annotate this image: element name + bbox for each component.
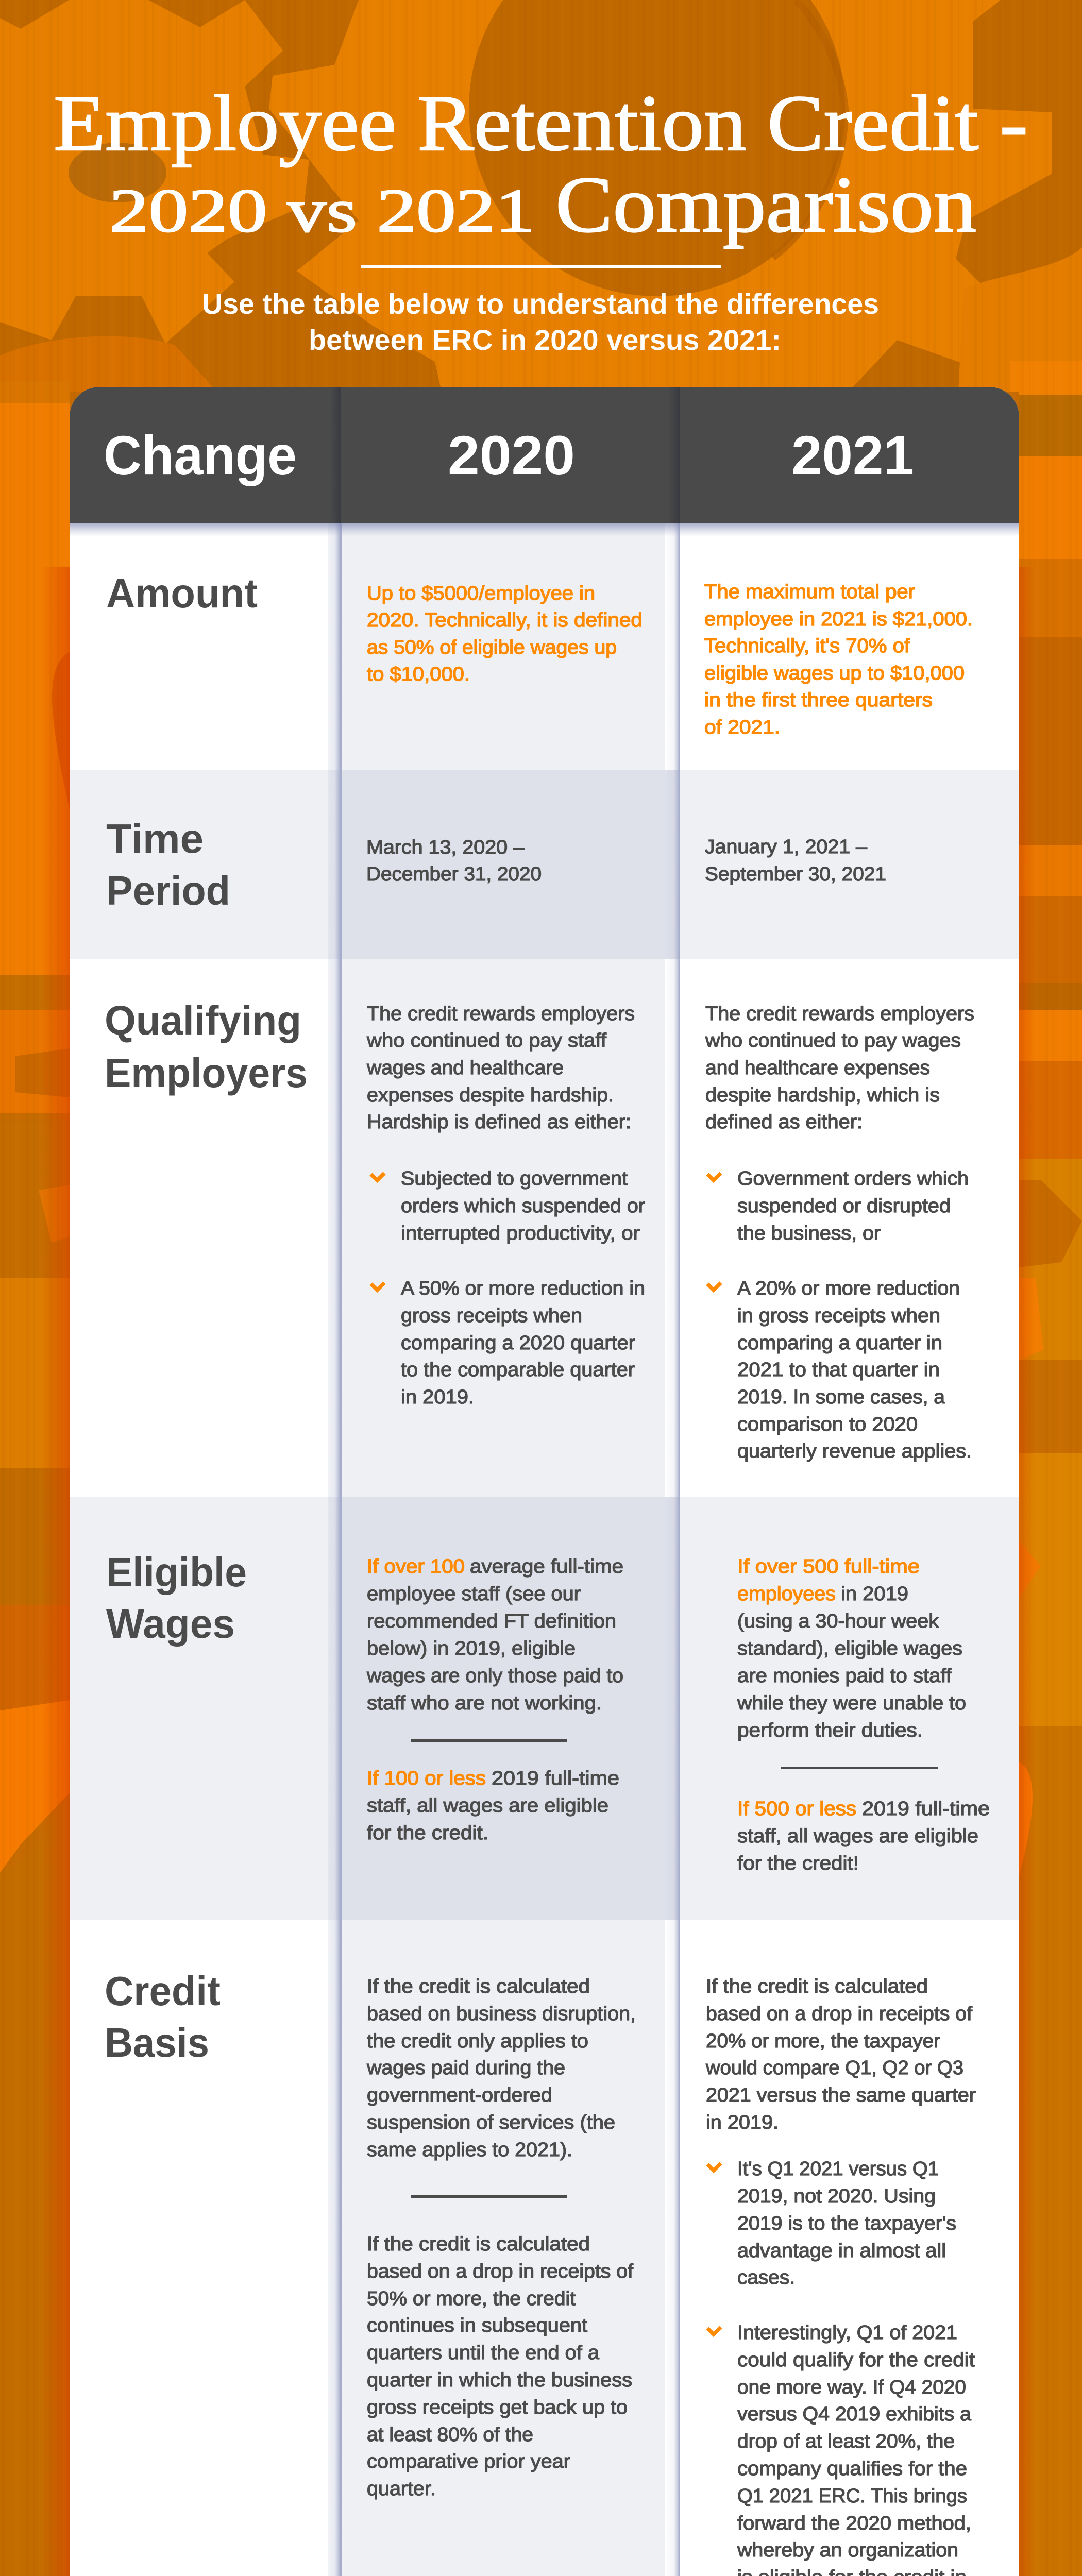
credit basis 2020: comparative prior year [367, 2451, 570, 2472]
credit basis 2021: in 2019. [706, 2112, 779, 2133]
row label: Eligible Wages: Eligible [106, 1549, 247, 1595]
amount 2020 text: to $10,000. [367, 664, 470, 685]
row label: Time Period: Time [106, 816, 204, 861]
time period 2020: March 13, 2020 – [366, 837, 525, 858]
icon: check [371, 1173, 384, 1180]
icon: check [371, 1283, 384, 1290]
title [54, 79, 1028, 249]
row band: eligible wages [70, 1497, 1019, 1920]
credit basis 2021: versus Q4 2019 exhibits a [737, 2403, 972, 2425]
credit basis 2021: advantage in almost all [737, 2240, 946, 2262]
qualifying employers 2021: The credit rewards employers [705, 1003, 974, 1025]
eligible wages 2021: staff, all wages are eligible [737, 1825, 978, 1847]
qualifying employers 2020: Subjected to government [401, 1168, 628, 1190]
qualifying employers 2020: The credit rewards employers [367, 1003, 635, 1025]
time period 2021 [705, 836, 886, 885]
qualifying employers 2021: despite hardship, which is [705, 1084, 940, 1106]
icon: check [707, 2327, 721, 2334]
icon: check [707, 1173, 721, 1180]
qualifying employers 2020: who continued to pay staff [366, 1030, 606, 1052]
qualifying employers 2020 [366, 1003, 645, 1408]
qualifying employers 2020: gross receipts when [401, 1305, 582, 1327]
amount 2021 text [704, 581, 973, 738]
qualifying employers 2021: quarterly revenue applies. [737, 1440, 972, 1462]
comparison table [70, 387, 1019, 2576]
qualifying employers 2020: in 2019. [401, 1386, 474, 1408]
time period 2020 [366, 837, 542, 885]
qualifying employers 2020: interrupted productivity, or [401, 1223, 640, 1244]
gear: inner ring shadow [773, 0, 845, 258]
qualifying employers 2021: in gross receipts when [737, 1305, 940, 1327]
eligible wages 2021: If 500 or less [737, 1798, 856, 1820]
icon: check [707, 2163, 721, 2171]
row label: Credit Basis: Basis [105, 2020, 209, 2065]
qualifying employers 2020: A 50% or more reduction in [401, 1278, 645, 1299]
eligible wages 2021 [737, 1556, 990, 1874]
qualifying employers 2021 [705, 1003, 974, 1462]
credit basis 2020: suspension of services (the [367, 2112, 615, 2133]
row label: Credit Basis [105, 1968, 221, 2065]
row label: Time Period: Period [106, 868, 230, 913]
qualifying employers 2020: Hardship is defined as either: [367, 1111, 631, 1133]
credit basis 2020: If the credit is calculated [367, 2233, 590, 2255]
credit basis 2021: 2019 is to the taxpayer's [737, 2213, 956, 2234]
eligible wages 2021: 2019 full-time [862, 1798, 990, 1820]
amount 2021 text: Technically, it's 70% of [704, 635, 910, 657]
amount 2020 text: as 50% of eligible wages up [367, 637, 617, 658]
credit basis 2021: forward the 2020 method, [737, 2513, 971, 2534]
hands at left and right edges [0, 336, 216, 392]
credit basis 2021: cases. [737, 2267, 795, 2289]
eligible wages 2021: perform their duties. [737, 1720, 923, 1741]
header bar [70, 387, 1019, 536]
row label: Eligible Wages [106, 1549, 247, 1647]
credit basis 2021: 2021 versus the same quarter [706, 2084, 976, 2106]
amount 2021 text: employee in 2021 is $21,000. [704, 608, 973, 630]
credit basis 2020: at least 80% of the [367, 2424, 533, 2446]
subtitle [202, 287, 879, 356]
credit basis 2020: government-ordered [367, 2084, 552, 2106]
credit basis 2020: quarters until the end of a [367, 2342, 600, 2364]
qualifying employers 2021: comparing a quarter in [737, 1332, 942, 1354]
eligible wages 2021: (using a 30-hour week [737, 1611, 939, 1632]
eligible wages 2020: staff who are not working. [367, 1692, 602, 1714]
eligible wages 2021: for the credit! [737, 1853, 859, 1874]
gear: centre [269, 0, 1052, 392]
amount 2021 text: of 2021. [704, 717, 780, 738]
row band: time period [70, 770, 1019, 959]
eligible wages 2021: while they were unable to [737, 1692, 966, 1714]
eligible wages 2020: 2019 full-time [492, 1768, 619, 1789]
gear: left hole [69, 143, 166, 202]
amount 2020 text: 2020. Technically, it is defined [367, 609, 643, 631]
eligible wages 2020: for the credit. [367, 1822, 488, 1844]
eligible wages 2021: standard), eligible wages [737, 1638, 962, 1659]
credit basis 2021: one more way. If Q4 2020 [737, 2377, 966, 2398]
gear: left [0, 0, 309, 344]
qualifying employers 2021: 2019. In some cases, a [737, 1386, 945, 1408]
row label: Qualifying Employers: Employers [105, 1050, 308, 1096]
amount 2021 text: in the first three quarters [704, 689, 933, 711]
amount 2020 text [367, 583, 643, 685]
qualifying employers 2020: orders which suspended or [401, 1195, 645, 1217]
credit basis 2020: quarter in which the business [367, 2369, 632, 2391]
qualifying employers 2020: expenses despite hardship. [367, 1084, 614, 1106]
credit basis 2020: based on business disruption, [367, 2003, 636, 2025]
qualifying employers 2021: who continued to pay wages [705, 1030, 961, 1052]
eligible wages 2020 [366, 1556, 623, 1844]
credit basis 2020: 50% or more, the credit [367, 2288, 576, 2310]
credit basis 2021: would compare Q1, Q2 or Q3 [705, 2057, 963, 2079]
credit basis 2020: gross receipts get back up to [367, 2397, 628, 2418]
credit basis 2020: wages paid during the [366, 2057, 565, 2079]
credit basis 2021: It's Q1 2021 versus Q1 [737, 2158, 939, 2180]
credit basis 2020: continues in subsequent [367, 2315, 587, 2336]
row label: Time Period [106, 816, 230, 913]
header: Change: Change [104, 424, 297, 486]
row label: Qualifying Employers: Qualifying [105, 997, 301, 1043]
row label: Eligible Wages: Wages [106, 1601, 235, 1647]
qualifying employers 2021: Government orders which [737, 1168, 969, 1190]
eligible wages 2020: If 100 or less [367, 1768, 486, 1789]
subtitle: Use the table below to understand the differences [202, 287, 879, 320]
left strip bands [0, 381, 70, 2576]
credit basis 2021: whereby an organization [737, 2539, 958, 2561]
eligible wages 2021: employees [737, 1583, 836, 1605]
row label: Amount: Amount [106, 570, 258, 616]
row label: Qualifying Employers [105, 997, 308, 1096]
qualifying employers 2020: wages and healthcare [366, 1057, 564, 1079]
time period 2021: January 1, 2021 – [705, 836, 868, 858]
amount 2021 text: eligible wages up to $10,000 [704, 663, 965, 684]
column 2020 shade [328, 523, 680, 2576]
qualifying employers 2021: defined as either: [705, 1111, 863, 1133]
eligible wages 2020: staff, all wages are eligible [367, 1795, 608, 1817]
title rule [361, 265, 721, 268]
credit basis 2021: company qualifies for the [737, 2458, 967, 2480]
qualifying employers 2021: the business, or [737, 1223, 881, 1244]
qualifying employers 2020: comparing a 2020 quarter [401, 1332, 635, 1354]
credit basis 2020: quarter. [367, 2478, 436, 2500]
credit basis 2021: Interestingly, Q1 of 2021 [737, 2322, 957, 2344]
credit basis 2020: based on a drop in receipts of [367, 2261, 633, 2282]
credit basis 2021: could qualify for the credit [737, 2349, 975, 2371]
eligible wages 2021: are monies paid to staff [737, 1665, 952, 1687]
credit basis 2021 [705, 1976, 976, 2576]
credit basis 2020: the credit only applies to [367, 2030, 588, 2052]
qualifying employers 2021: suspended or disrupted [737, 1195, 951, 1217]
credit basis 2021: Q1 2021 ERC. This brings [737, 2485, 967, 2507]
time period 2020: December 31, 2020 [366, 863, 542, 885]
qualifying employers 2020: to the comparable quarter [401, 1359, 635, 1381]
eligible wages 2020: wages are only those paid to [366, 1665, 623, 1687]
credit basis 2021: drop of at least 20%, the [737, 2431, 955, 2452]
amount 2021 text: The maximum total per [704, 581, 915, 603]
header: 2020: 2020 [448, 424, 575, 486]
row label: Credit Basis: Credit [105, 1968, 221, 2014]
eligible wages 2021: If over 500 full-time [737, 1556, 920, 1578]
eligible wages 2021: in 2019 [841, 1583, 908, 1605]
time period 2021: September 30, 2021 [705, 863, 886, 885]
credit basis 2020: same applies to 2021). [367, 2139, 572, 2161]
credit basis 2021: If the credit is calculated [706, 1976, 928, 1997]
eligible wages 2020: employee staff (see our [367, 1583, 581, 1605]
qualifying employers 2021: 2021 to that quarter in [737, 1359, 940, 1381]
subtitle: between ERC in 2020 versus 2021: [309, 324, 781, 356]
title: 2020 vs 2021 [109, 176, 535, 245]
qualifying employers 2021: comparison to 2020 [737, 1414, 918, 1435]
credit basis 2020 [366, 1976, 636, 2500]
qualifying employers 2021: A 20% or more reduction [737, 1278, 960, 1299]
eligible wages 2020: below) in 2019, eligible [367, 1638, 576, 1659]
title: Comparison [555, 160, 976, 249]
amount 2020 text: Up to $5000/employee in [367, 583, 595, 604]
credit basis 2021: 20% or more, the taxpayer [706, 2030, 940, 2052]
icon: check [707, 1283, 721, 1290]
credit basis 2021: 2019, not 2020. Using [737, 2185, 936, 2207]
credit basis 2021: based on a drop in receipts of [706, 2003, 972, 2025]
right strip bands [1019, 361, 1082, 2576]
header: 2021: 2021 [791, 424, 914, 486]
eligible wages 2020: If over 100 [367, 1556, 465, 1578]
eligible wages 2020: recommended FT definition [367, 1611, 616, 1632]
title: Employee Retention Credit - [54, 79, 1028, 167]
qualifying employers 2021: and healthcare expenses [705, 1057, 930, 1079]
credit basis 2020: If the credit is calculated [367, 1976, 590, 1997]
eligible wages 2020: average full-time [470, 1556, 623, 1578]
